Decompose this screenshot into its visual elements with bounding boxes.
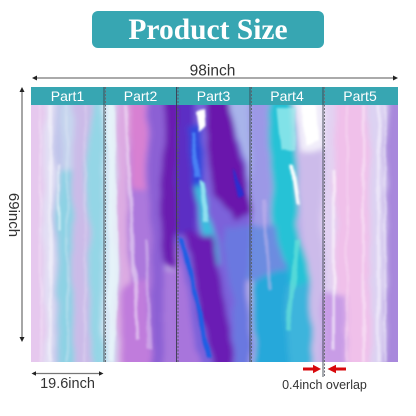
width dimension: 98inch xyxy=(32,62,398,80)
part header bar: Part4 xyxy=(270,88,304,104)
part header bar: Part2 xyxy=(124,88,157,104)
part width dimension: 19.6inch xyxy=(32,371,104,392)
part 1 xyxy=(31,105,48,362)
overlap label: 0.4inch overlap xyxy=(282,378,367,392)
title banner xyxy=(92,11,324,48)
title banner: Product Size xyxy=(128,14,288,46)
part header bar: Part5 xyxy=(343,88,377,104)
height dimension: 69inch: 69inch xyxy=(5,193,22,237)
part 3 xyxy=(176,90,256,380)
marbled artwork xyxy=(31,105,398,362)
part 2 xyxy=(103,90,115,380)
part 5 xyxy=(323,90,337,380)
part 4 xyxy=(242,106,301,362)
part header bar: Part3 xyxy=(197,88,230,104)
height dimension: 69inch xyxy=(5,87,24,342)
streaks and sparkles xyxy=(49,105,52,362)
part header bar xyxy=(31,87,398,105)
part width dimension: 19.6inch: 19.6inch xyxy=(40,376,95,392)
overlap callout: red arrows xyxy=(303,365,346,373)
panel seam lines xyxy=(104,87,324,377)
part header bar: Part1 xyxy=(51,88,84,104)
width dimension: 98inch: 98inch xyxy=(190,62,235,80)
